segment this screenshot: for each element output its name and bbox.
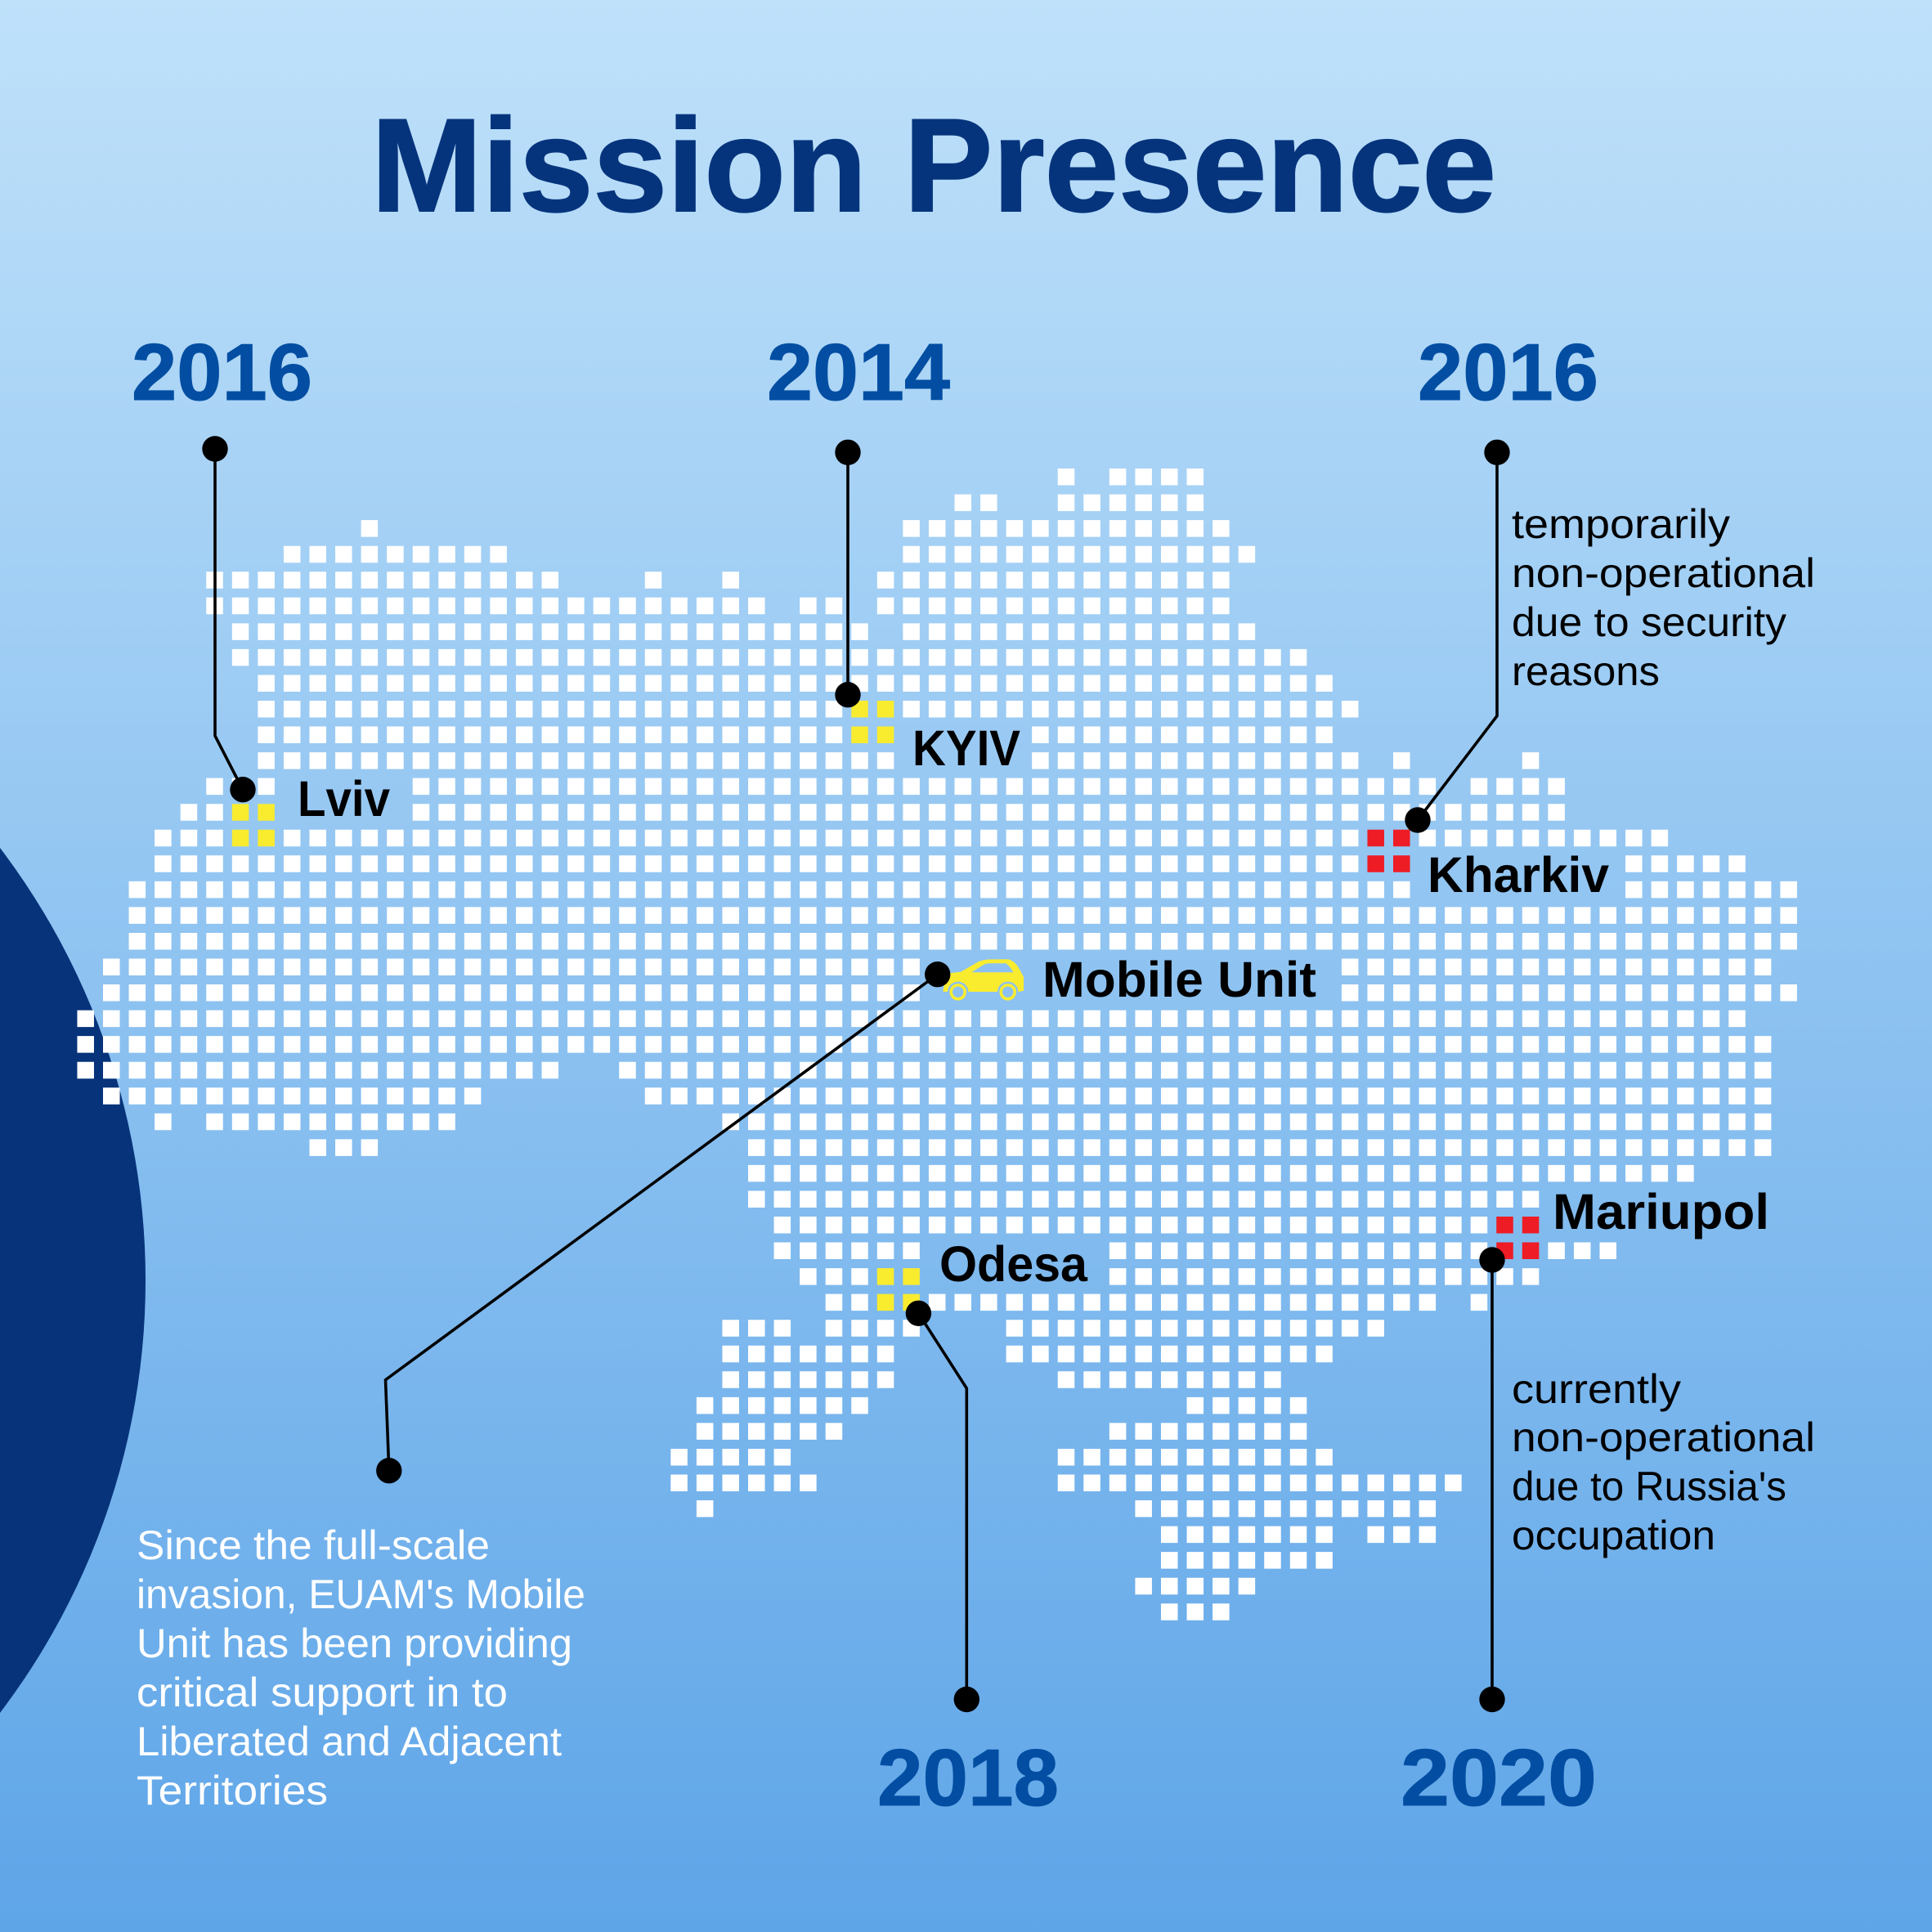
note: Mariupol status: occupation	[1512, 1513, 1715, 1558]
connector: Mariupol	[1479, 1247, 1505, 1712]
note: Kharkiv status: due to security	[1512, 599, 1786, 645]
note: Mariupol status	[1512, 1366, 1815, 1558]
note: Mobile Unit description: Since the full-scale	[137, 1522, 490, 1568]
icon: yellow car	[943, 959, 1024, 1002]
note: Mobile Unit description: invasion, EUAM's Mobile	[137, 1571, 585, 1617]
note: Mobile Unit description: Liberated and Adjacent	[137, 1719, 562, 1764]
connector: Kyiv	[835, 440, 861, 707]
note: Mobile Unit description	[137, 1522, 585, 1813]
note: Kharkiv status	[1512, 501, 1815, 694]
note: Kharkiv status: reasons	[1512, 648, 1660, 694]
dotted map of Ukraine	[77, 477, 1797, 1611]
note: Kharkiv status: temporarily	[1512, 501, 1730, 547]
label: KYIV: KYIV	[912, 720, 1020, 776]
note: Mobile Unit description: Territories	[137, 1768, 328, 1813]
dark blue circle at left edge	[0, 565, 146, 1932]
year: Odesa 2018: 2018	[877, 1733, 1059, 1822]
connector: Mobile Unit	[376, 962, 950, 1483]
note: Mariupol status: due to Russia's	[1512, 1464, 1786, 1509]
note: Mobile Unit description: critical support in to	[137, 1670, 508, 1715]
year: Mariupol 2020: 2020	[1401, 1733, 1597, 1822]
label: Mobile Unit: Mobile Unit	[1042, 952, 1316, 1007]
red city markers: Kharkiv, Mariupol	[1367, 838, 1539, 1251]
year: Lviv 2016: 2016	[132, 327, 312, 417]
label: Kharkiv: Kharkiv	[1428, 847, 1609, 903]
year: Kyiv 2014: 2014	[767, 327, 950, 417]
note: Mariupol status: non-operational	[1512, 1414, 1815, 1460]
connector: Odesa	[906, 1301, 979, 1712]
connector: Lviv	[202, 436, 256, 802]
label: Mariupol: Mariupol	[1553, 1184, 1769, 1239]
yellow city markers: Lviv, Kyiv, Odesa	[232, 709, 920, 1302]
note: Mariupol status: currently	[1512, 1366, 1681, 1412]
note: Mobile Unit description: Unit has been providing	[137, 1620, 572, 1666]
label: Odesa: Odesa	[939, 1236, 1088, 1292]
map squares: white	[77, 477, 1797, 1611]
note: Kharkiv status: non-operational	[1512, 550, 1815, 596]
label: Lviv: Lviv	[298, 771, 390, 827]
year: Kharkiv 2016: 2016	[1418, 327, 1598, 417]
connector: Kharkiv	[1405, 440, 1510, 833]
title: Mission Presence	[371, 92, 1496, 240]
